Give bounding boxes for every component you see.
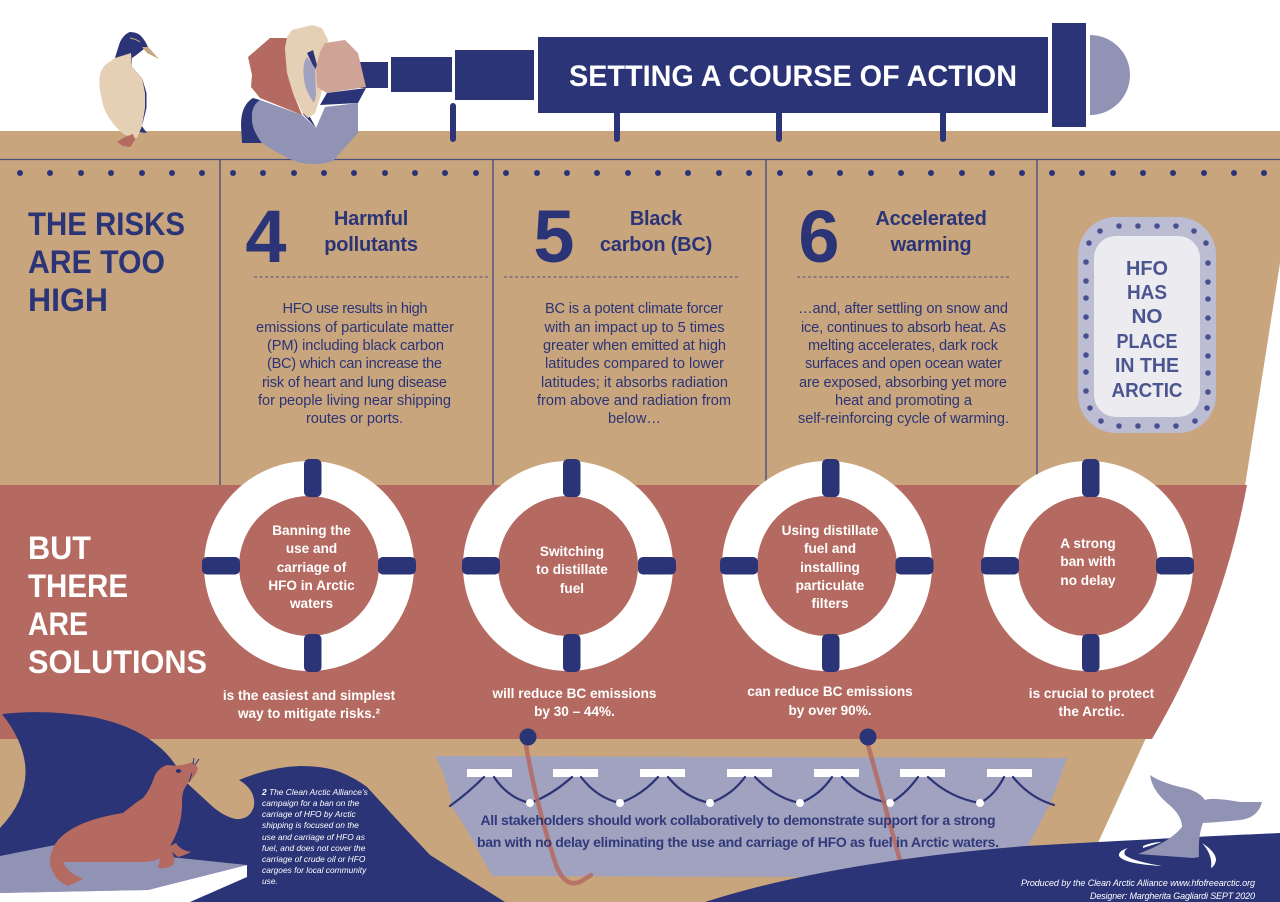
- solution captions: by over 90%.: [788, 703, 872, 718]
- column dividers: [220, 160, 1037, 485]
- body text: …and, after settling on snow and: [798, 301, 1008, 317]
- lifebuoy 2: [462, 459, 676, 672]
- lifebuoy text: Switching: [540, 544, 604, 559]
- lifebuoy 1: [202, 459, 416, 672]
- body text: ice, continues to absorb heat. As: [801, 320, 1006, 336]
- solution captions: way to mitigate risks.²: [237, 706, 380, 721]
- footnote: carriage of crude oil or HFO: [262, 854, 366, 864]
- heading: accelerated warming: [875, 208, 987, 256]
- body text: [537, 301, 731, 427]
- body text: with an impact up to 5 times: [544, 320, 724, 336]
- body text: HFO use results in high: [282, 301, 428, 317]
- lifebuoy text: [782, 523, 879, 611]
- deck rivets: [17, 170, 1267, 176]
- lifebuoy text: carriage of: [277, 560, 347, 575]
- icon: whale tail: [1119, 775, 1262, 868]
- heading: but there are solutions: [28, 530, 207, 680]
- heading: black carbon: Black: [630, 208, 683, 230]
- lifebuoy text: filters: [811, 596, 849, 611]
- body text: routes or ports.: [306, 411, 403, 427]
- lifebuoy text: ban with: [1060, 554, 1116, 569]
- body text: greater when emitted at high: [543, 338, 726, 354]
- footnote: 2 The Clean Arctic Alliance’s: [261, 787, 369, 797]
- porthole text: HFO: [1126, 258, 1168, 280]
- solution captions: is the easiest and simplest: [223, 688, 396, 703]
- footnote: use and carriage of HFO as: [262, 832, 366, 842]
- porthole text: [1112, 258, 1182, 402]
- red solutions band: [0, 485, 1247, 739]
- lifebuoy text: fuel: [560, 581, 584, 596]
- body text: risk of heart and lung disease: [262, 375, 447, 391]
- body text: [798, 301, 1009, 427]
- lifebuoy text: Banning the: [272, 523, 351, 538]
- panel: black carbon: [504, 195, 739, 427]
- solution captions: by 30 – 44%.: [534, 704, 615, 719]
- panel: accelerated warming: [797, 195, 1010, 427]
- ice floe: [0, 845, 247, 902]
- porthole text: PLACE: [1116, 331, 1178, 353]
- credits: [1021, 878, 1255, 901]
- heading: but there are solutions: SOLUTIONS: [28, 644, 207, 680]
- body text: self-reinforcing cycle of warming.: [798, 411, 1009, 427]
- heading: harmful pollutants: Harmful: [334, 208, 408, 230]
- lifeboat: [435, 756, 1067, 877]
- panel: porthole: [1078, 217, 1216, 433]
- body text: latitudes compared to lower: [545, 356, 724, 372]
- icon: person with telescope: [241, 25, 366, 164]
- body text: latitudes; it absorbs radiation: [541, 375, 728, 391]
- solution captions: [223, 684, 1155, 721]
- footnote: shipping is focused on the: [262, 820, 359, 830]
- body text: (PM) including black carbon: [267, 338, 444, 354]
- heading: accelerated warming: warming: [890, 234, 971, 256]
- porthole text: NO: [1132, 306, 1162, 328]
- number 4: 4: [245, 195, 287, 278]
- lifebuoy text: A strong: [1060, 536, 1116, 551]
- lifebuoy text: HFO in Arctic: [268, 578, 355, 593]
- heading: harmful pollutants: [324, 208, 418, 256]
- number 6: 6: [798, 195, 840, 278]
- ship hull upper deck: [0, 131, 1280, 486]
- body text: are exposed, absorbing yet more: [799, 375, 1007, 391]
- lifebuoy text: [536, 544, 608, 596]
- number 5: 5: [533, 195, 575, 278]
- heading: the risks are too high: [28, 206, 185, 318]
- icon: penguin: [99, 32, 159, 147]
- lifebuoy text: use and: [286, 541, 337, 556]
- lifebuoy text: to distillate: [536, 562, 608, 577]
- heading: accelerated warming: Accelerated: [875, 208, 987, 230]
- heading: the risks are too high: THE RISKS: [28, 206, 185, 242]
- heading: but there are solutions: THERE: [28, 568, 128, 604]
- panel: harmful pollutants: [245, 195, 488, 427]
- body text: [256, 301, 454, 427]
- lifebuoy text: waters: [289, 596, 333, 611]
- footnote: use.: [262, 876, 278, 886]
- wave right: [705, 833, 1280, 902]
- wave left with footnote area: [0, 712, 505, 902]
- lifeboat call to action: All stakeholders should work collaboratively to demonstrate support for a strong: [480, 812, 996, 828]
- lifebuoy text: no delay: [1060, 573, 1116, 588]
- icon: telescope: [359, 23, 1130, 142]
- heading: the risks are too high: HIGH: [28, 282, 108, 318]
- credits: Designer: Margherita Gagliardi SEPT 2020: [1090, 891, 1255, 901]
- porthole text: ARCTIC: [1112, 380, 1182, 402]
- heading: black carbon: [600, 208, 712, 256]
- lifebuoy 3: [720, 459, 934, 672]
- anchor chains: [520, 728, 901, 883]
- heading: the risks are too high: ARE TOO: [28, 244, 165, 280]
- title: SETTING A COURSE OF ACTION: [569, 60, 1017, 93]
- footnote: [261, 787, 369, 886]
- deck line: [0, 158, 1280, 160]
- porthole text: HAS: [1127, 282, 1167, 304]
- lifebuoy text: [268, 523, 355, 611]
- solution captions: will reduce BC emissions: [492, 686, 656, 701]
- lifebuoy text: installing: [800, 560, 860, 575]
- porthole text: IN THE: [1115, 355, 1179, 377]
- solution captions: is crucial to protect: [1029, 686, 1155, 701]
- body text: heat and promoting a: [835, 393, 973, 409]
- lifebuoy text: Using distillate: [782, 523, 879, 538]
- body text: (BC) which can increase the: [267, 356, 442, 372]
- body text: melting accelerates, dark rock: [808, 338, 999, 354]
- body text: from above and radiation from: [537, 393, 731, 409]
- heading: but there are solutions: BUT: [28, 530, 91, 566]
- body text: for people living near shipping: [258, 393, 451, 409]
- footnote: cargoes for local community: [262, 865, 367, 875]
- solution captions: can reduce BC emissions: [747, 684, 913, 699]
- heading: black carbon: carbon (BC): [600, 234, 712, 256]
- ship hull lower section: [0, 738, 1146, 902]
- icon: seal: [50, 758, 199, 886]
- body text: surfaces and open ocean water: [805, 356, 1002, 372]
- heading: but there are solutions: ARE: [28, 606, 88, 642]
- solution captions: the Arctic.: [1059, 704, 1124, 719]
- heading: harmful pollutants: pollutants: [324, 234, 418, 256]
- lifeboat call to action: [477, 812, 999, 850]
- lifebuoy text: fuel and: [804, 541, 856, 556]
- body text: BC is a potent climate forcer: [545, 301, 723, 317]
- footnote: carriage of HFO by Arctic: [262, 809, 357, 819]
- body text: emissions of particulate matter: [256, 320, 454, 336]
- lifebuoy text: particulate: [796, 578, 865, 593]
- lifebuoy 4: [981, 459, 1194, 672]
- lifebuoy text: [1060, 536, 1116, 588]
- body text: below…: [608, 411, 661, 427]
- footnote: fuel, and does not cover the: [262, 843, 366, 853]
- credits: Produced by the Clean Arctic Alliance www.hfofreearctic.org: [1021, 878, 1255, 888]
- footnote: campaign for a ban on the: [262, 798, 360, 808]
- lifeboat call to action: ban with no delay eliminating the use and carriage of HFO as fuel in Arctic waters.: [477, 834, 999, 850]
